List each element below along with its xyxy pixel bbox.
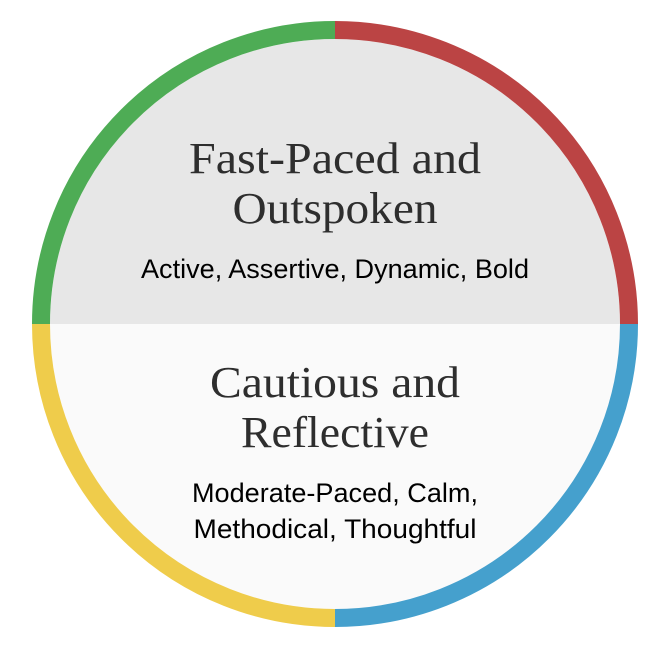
text: bottom traits: Moderate-Paced, Calm, <box>192 478 478 508</box>
text: bottom traits <box>192 478 478 544</box>
arc: blue, bottom right <box>335 324 629 618</box>
arc: red, top right <box>335 30 629 324</box>
text: top traits: Active, Assertive, Dynamic, Bold <box>141 254 529 284</box>
heading: Cautious and Reflective <box>210 358 460 457</box>
panel: bottom half, cautious and reflective <box>50 324 620 609</box>
ring: four coloured arcs <box>41 30 629 618</box>
heading: Fast-Paced and Outspoken: Outspoken <box>232 184 438 233</box>
heading: Cautious and Reflective: Cautious and <box>210 358 460 407</box>
arc: yellow, bottom left <box>41 324 335 618</box>
text: bottom traits: Methodical, Thoughtful <box>194 514 476 544</box>
heading: Fast-Paced and Outspoken <box>189 134 481 233</box>
heading: Fast-Paced and Outspoken: Fast-Paced and <box>189 134 481 183</box>
heading: Cautious and Reflective: Reflective <box>241 408 429 457</box>
arc: green, top left <box>41 30 335 324</box>
panel: top half, fast-paced and outspoken <box>50 39 620 324</box>
